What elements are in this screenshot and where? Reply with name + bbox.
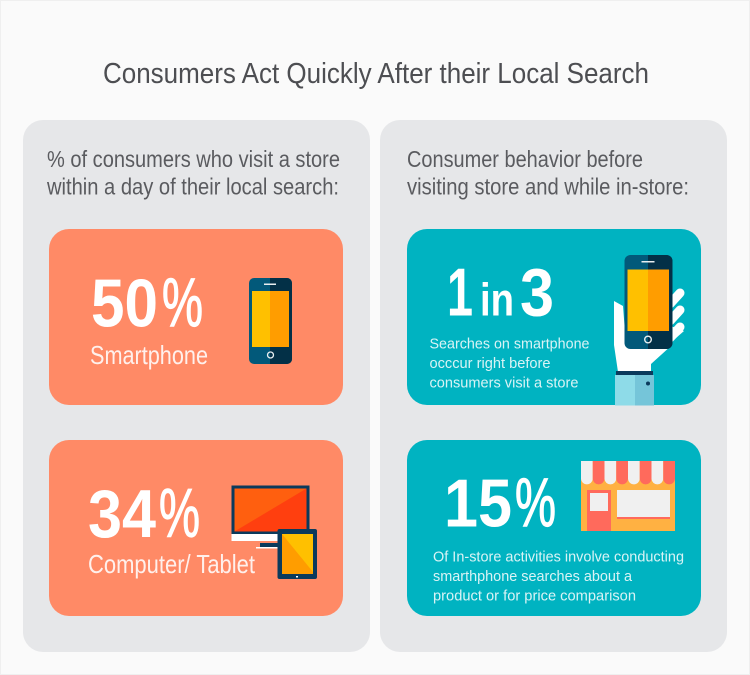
panel: consumer behavior (380, 120, 727, 652)
description: in-store activities: product or for price comparison (433, 588, 636, 604)
stat: 1 in 3: 3 (520, 254, 554, 330)
stat: 15%: % (515, 464, 556, 541)
panel heading: right (407, 146, 689, 200)
stat: 1 in 3 (447, 254, 554, 330)
card: smartphone 50% (49, 229, 343, 405)
panel heading: left: within a day of their local search: (46, 174, 339, 200)
description: searches on smartphone: occcur right before (430, 355, 550, 372)
stat: 50% (91, 264, 203, 342)
panel heading: right: visiting store and while in-store: (407, 174, 689, 200)
panel: store visits within a day (23, 120, 370, 652)
panel heading: right: Consumer behavior before (407, 146, 643, 172)
stat: 50%: 50 (91, 266, 158, 342)
stat: 50%: % (162, 264, 203, 341)
description: searches on smartphone (430, 336, 590, 392)
description: searches on smartphone: consumers visit a store (430, 374, 578, 392)
label: Smartphone: Smartphone (90, 340, 208, 370)
stat: 34%: % (159, 474, 200, 552)
card: 1 in 3 searches (407, 229, 701, 406)
icon: smartphone (249, 278, 292, 364)
description: in-store activities: smarthphone searches about a (433, 568, 633, 585)
icon: hand holding smartphone (614, 255, 684, 406)
panel heading: left: % of consumers who visit a store (47, 146, 340, 172)
label: Computer/ Tablet: Computer/ Tablet (88, 549, 256, 579)
icon: monitor and tablet (232, 486, 317, 579)
card: 15% in-store activities (407, 440, 701, 616)
title: Consumers Act Quickly After their Local Search (103, 58, 649, 90)
stat: 15%: 15 (444, 466, 512, 542)
stat: 34% (88, 474, 200, 552)
stat: 15% (444, 464, 556, 542)
stat: 1 in 3: 1 (447, 254, 473, 330)
card: computer and tablet 34% (49, 440, 343, 616)
icon: storefront (581, 461, 675, 531)
panel heading: left (46, 146, 340, 200)
description: in-store activities: Of In-store activities involve conducting (433, 548, 684, 566)
stat: 1 in 3: in (480, 274, 514, 326)
stat: 34%: 34 (88, 476, 156, 552)
description: in-store activities (433, 548, 684, 604)
description: searches on smartphone: Searches on smartphone (430, 336, 590, 352)
